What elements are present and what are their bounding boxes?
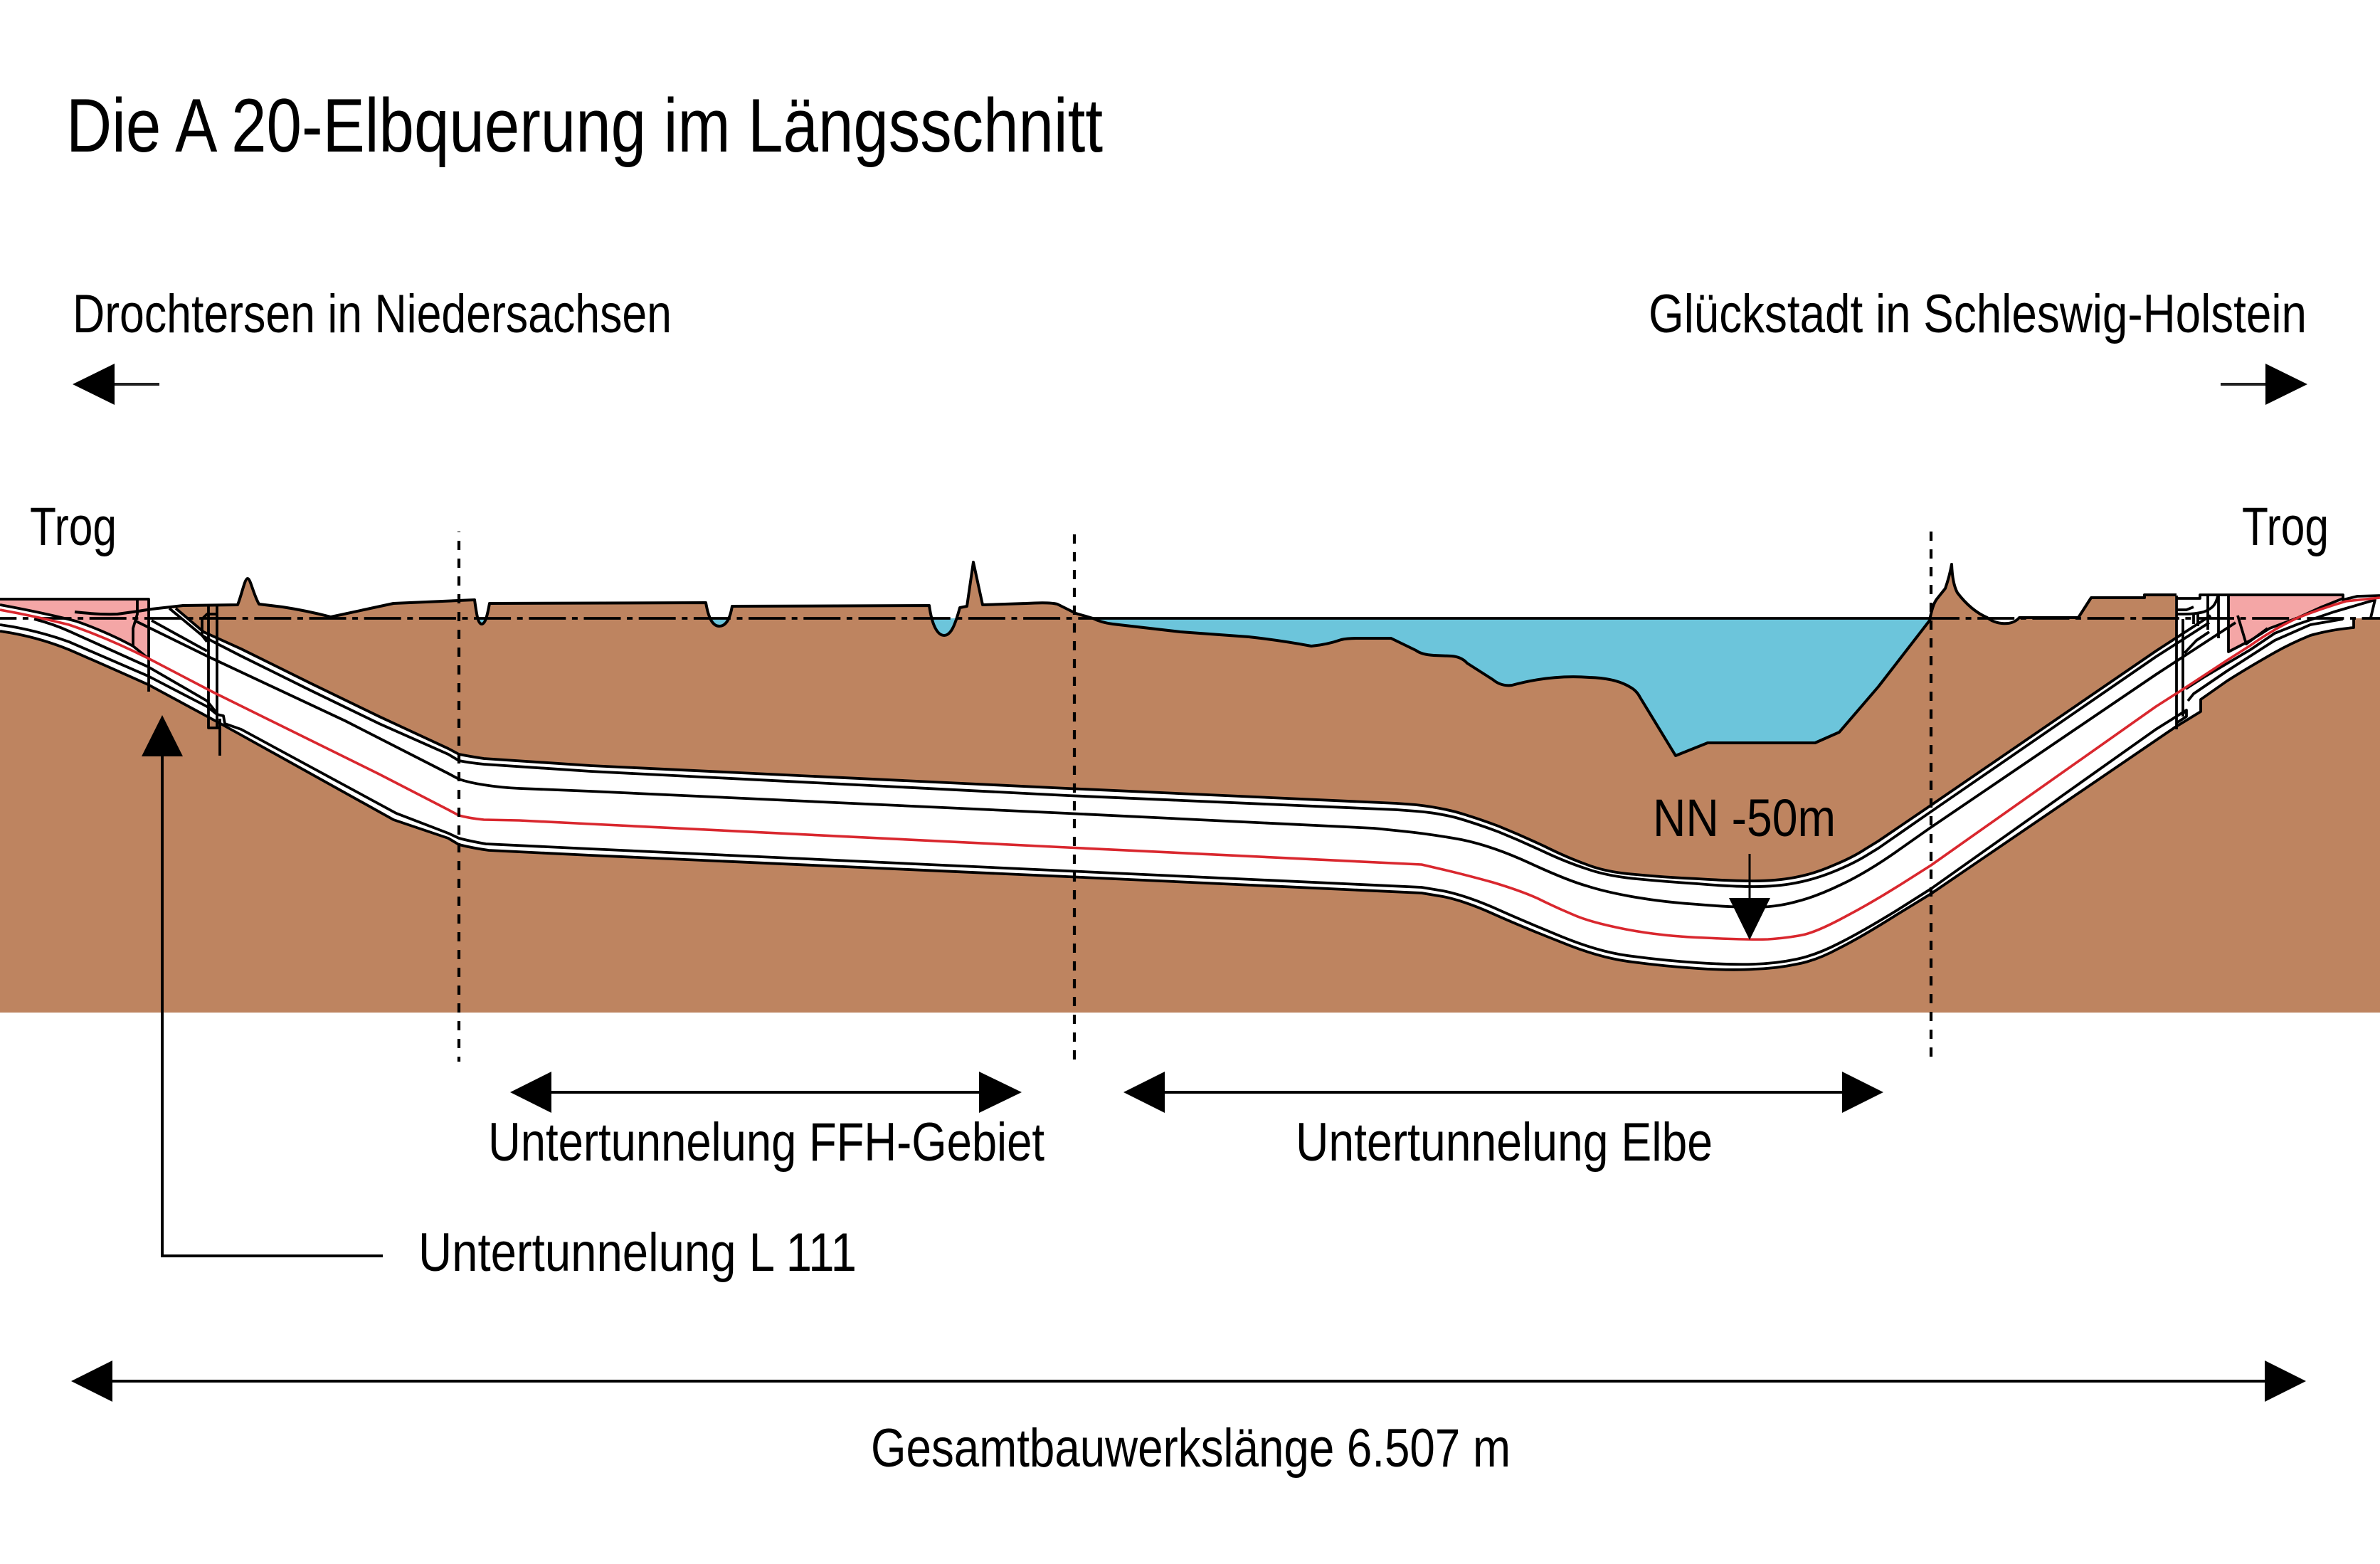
- section divider 2: [1073, 534, 1076, 1060]
- title: Die A 20-Elbquerung im Längsschnitt: [66, 83, 1103, 168]
- arrow: towards Drochtersen: [73, 364, 159, 405]
- label: Trog left: Trog: [30, 497, 117, 557]
- label: L 111: Untertunnelung L 111: [418, 1222, 857, 1283]
- label: NN -50m: NN -50m: [1653, 788, 1836, 847]
- section divider 1: [458, 532, 460, 1062]
- arrow: total length: [71, 1360, 2306, 1402]
- road centre line: [0, 598, 2380, 939]
- heading: Drochtersen: Drochtersen in Niedersachsen: [73, 284, 672, 344]
- section divider 3: [1930, 532, 1932, 1057]
- tunnel wall lines: [0, 595, 2380, 970]
- label: Elbe: Untertunnelung Elbe: [1296, 1112, 1713, 1173]
- ground cross-section: [0, 562, 2380, 1013]
- river Elbe water: [1093, 618, 1930, 756]
- arrow: L 111 callout: [142, 715, 383, 1256]
- trough left: [0, 599, 149, 658]
- arrow: FFH span: [510, 1072, 1022, 1113]
- trough right: [2228, 595, 2343, 652]
- arrow: Elbe span: [1123, 1072, 1883, 1113]
- tunnel body: [0, 595, 2380, 1013]
- terrain outline: [75, 562, 2177, 756]
- arrow: towards Glückstadt: [2221, 364, 2307, 405]
- arrow: depth marker: [1729, 854, 1770, 940]
- datum line: [0, 617, 2380, 620]
- label: total length: Gesamtbauwerkslänge 6.507 m: [871, 1418, 1511, 1479]
- label: Trog right: Trog: [2242, 497, 2329, 557]
- streams: [475, 618, 959, 635]
- ground below tunnel: [0, 618, 2380, 1013]
- label: FFH: Untertunnelung FFH-Gebiet: [488, 1112, 1044, 1173]
